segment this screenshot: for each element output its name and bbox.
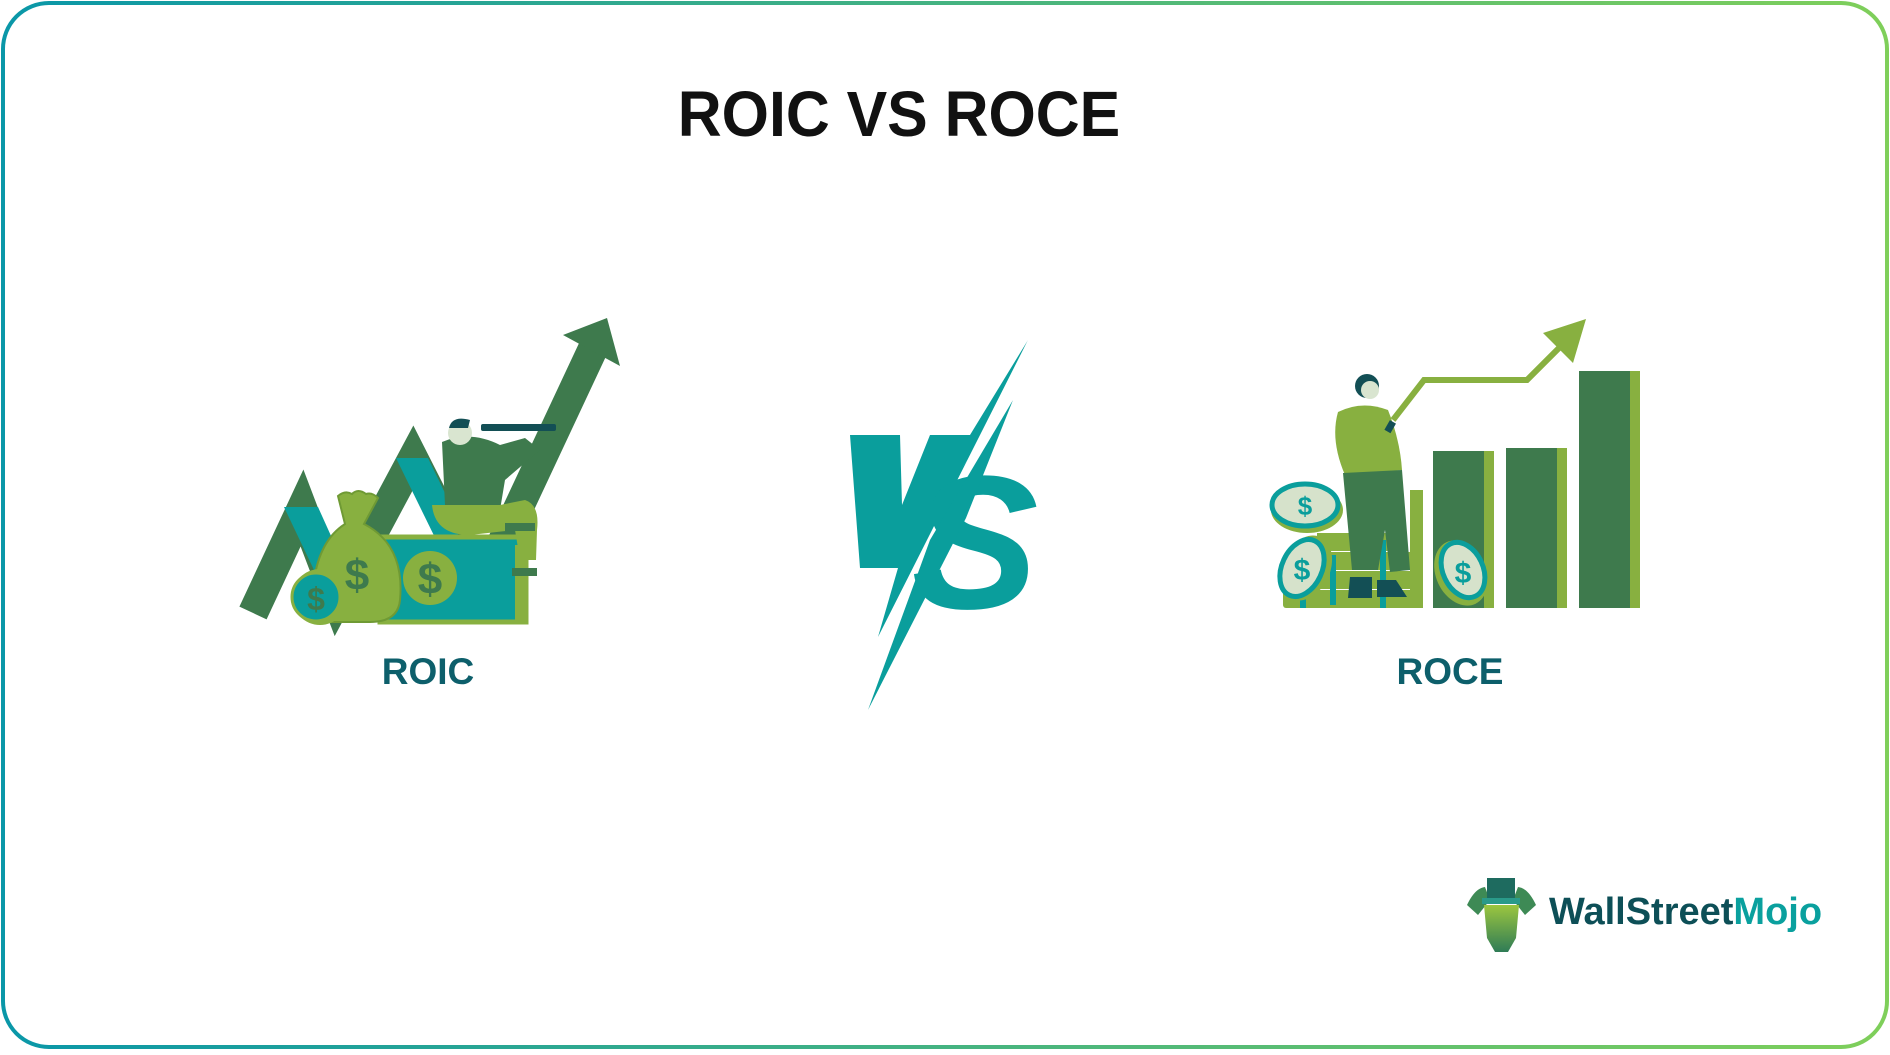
man with telescope	[432, 419, 556, 576]
coin: $	[307, 581, 325, 617]
coin stacks: $	[1298, 491, 1313, 521]
logo: WallStreetMojo: WallStreetMojo	[1549, 891, 1822, 933]
label: ROCE: ROCE	[1397, 651, 1503, 692]
woman with phone	[1335, 374, 1410, 598]
trend arrow	[1393, 319, 1586, 420]
title: ROIC VS ROCE	[678, 79, 1120, 150]
coin stacks: $	[1455, 557, 1472, 590]
logo: WallStreetMojo	[1467, 878, 1822, 952]
money bill: $	[418, 555, 442, 604]
VS emblem	[850, 340, 1038, 710]
money bag: $	[345, 551, 369, 600]
VS emblem: S	[912, 437, 1038, 649]
bar chart	[1433, 371, 1640, 608]
money bag	[312, 491, 401, 622]
coin	[292, 569, 348, 625]
zigzag growth arrow	[253, 318, 620, 613]
label: ROIC: ROIC	[382, 651, 474, 692]
money bill	[380, 537, 526, 622]
coin stacks: $	[1294, 554, 1311, 587]
coin stacks	[1270, 484, 1498, 614]
illustration: ROCE	[1270, 319, 1640, 614]
icon: bull with hat	[1467, 878, 1536, 952]
illustration: ROIC	[253, 318, 620, 625]
